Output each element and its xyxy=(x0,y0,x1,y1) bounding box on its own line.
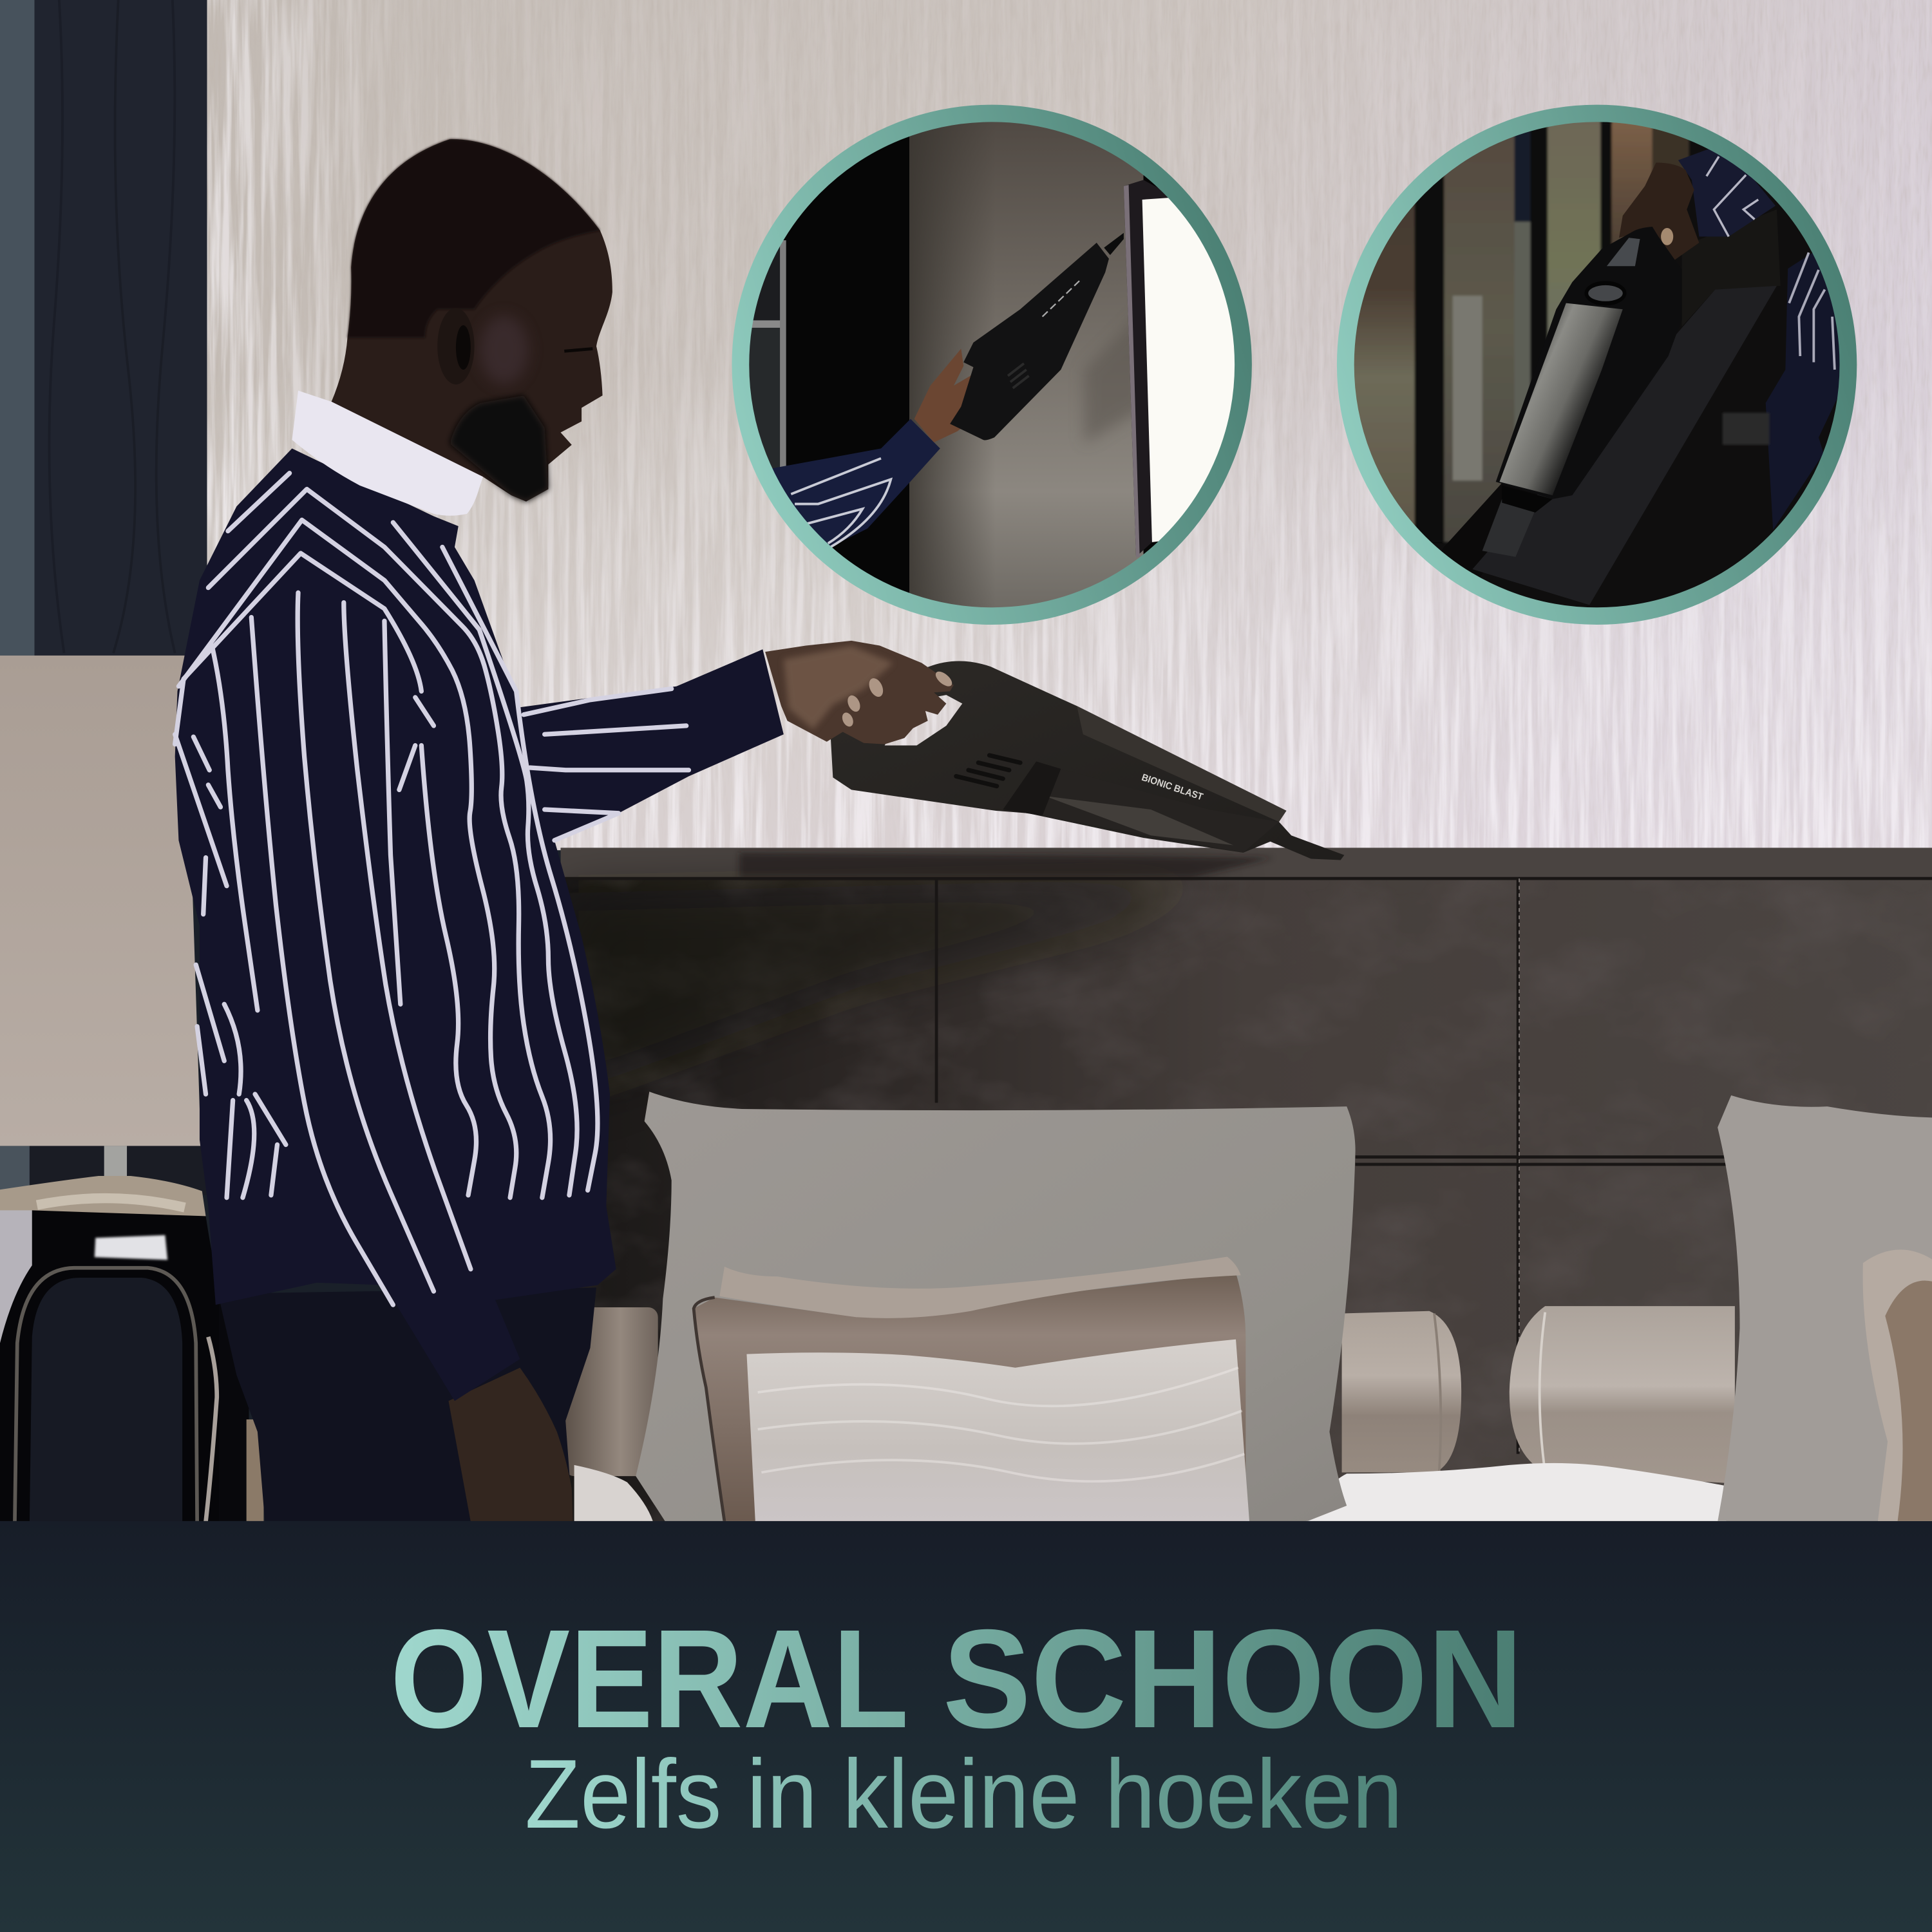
heading xyxy=(390,1601,1523,1757)
control panel xyxy=(1607,238,1640,266)
dark window frame base xyxy=(1429,483,1540,616)
dark wood panel at left xyxy=(0,0,207,656)
man: trousers xyxy=(218,1287,596,1522)
hand xyxy=(1619,163,1699,266)
vacuum vent slots xyxy=(956,755,1020,786)
vacuum body xyxy=(950,243,1109,440)
photo: bedroom scene xyxy=(0,0,1932,1522)
person torso xyxy=(1766,249,1842,530)
inset ring xyxy=(1345,113,1848,616)
wall behind ledge xyxy=(1682,209,1781,327)
upholstered headboard xyxy=(561,848,1932,1522)
man: lower hand xyxy=(448,1368,573,1522)
subheading: Zelfs in kleine hoeken xyxy=(525,1739,1403,1849)
heading: OVERAL xyxy=(390,1601,909,1757)
man: navy striped sweater xyxy=(175,448,784,1401)
vacuum nozzle xyxy=(1482,499,1535,557)
vacuum body xyxy=(1496,227,1682,499)
white bedding xyxy=(574,1463,1726,1522)
tan satin pillow xyxy=(694,1257,1245,1522)
man: white shirt collar xyxy=(292,391,483,516)
sweater stripes xyxy=(175,473,689,1305)
bottom caption panel xyxy=(0,1521,1932,1932)
vacuum button xyxy=(1584,281,1627,305)
right grey velvet pillow xyxy=(1718,1095,1932,1522)
man: head and neck xyxy=(332,139,612,502)
man: hand gripping vacuum xyxy=(765,641,954,744)
circle inset: cleaning window sill xyxy=(1343,111,1851,618)
clear dust canister xyxy=(1499,303,1623,495)
white textured pillow xyxy=(746,1340,1249,1522)
table lamp xyxy=(0,656,263,1522)
inset photo content xyxy=(739,111,1251,618)
vacuum nozzle xyxy=(1104,233,1124,255)
large grey velvet pillow xyxy=(636,1092,1356,1522)
inset ring xyxy=(741,113,1243,616)
heading: SCHOON xyxy=(943,1601,1523,1757)
person sleeve xyxy=(1678,147,1776,236)
inset photo content xyxy=(1343,111,1851,618)
textured plaster wall xyxy=(207,0,1932,850)
sleeve xyxy=(739,419,940,547)
satin bolster cushions xyxy=(564,1306,1735,1484)
right small tan pillow xyxy=(1863,1249,1932,1522)
vacuum product label: BIONIC BLAST xyxy=(1140,772,1205,803)
window sill ledge xyxy=(1472,286,1777,605)
handheld vacuum cleaner xyxy=(829,661,1344,860)
hand xyxy=(914,348,981,442)
circle inset: reaching high corner xyxy=(739,111,1251,618)
